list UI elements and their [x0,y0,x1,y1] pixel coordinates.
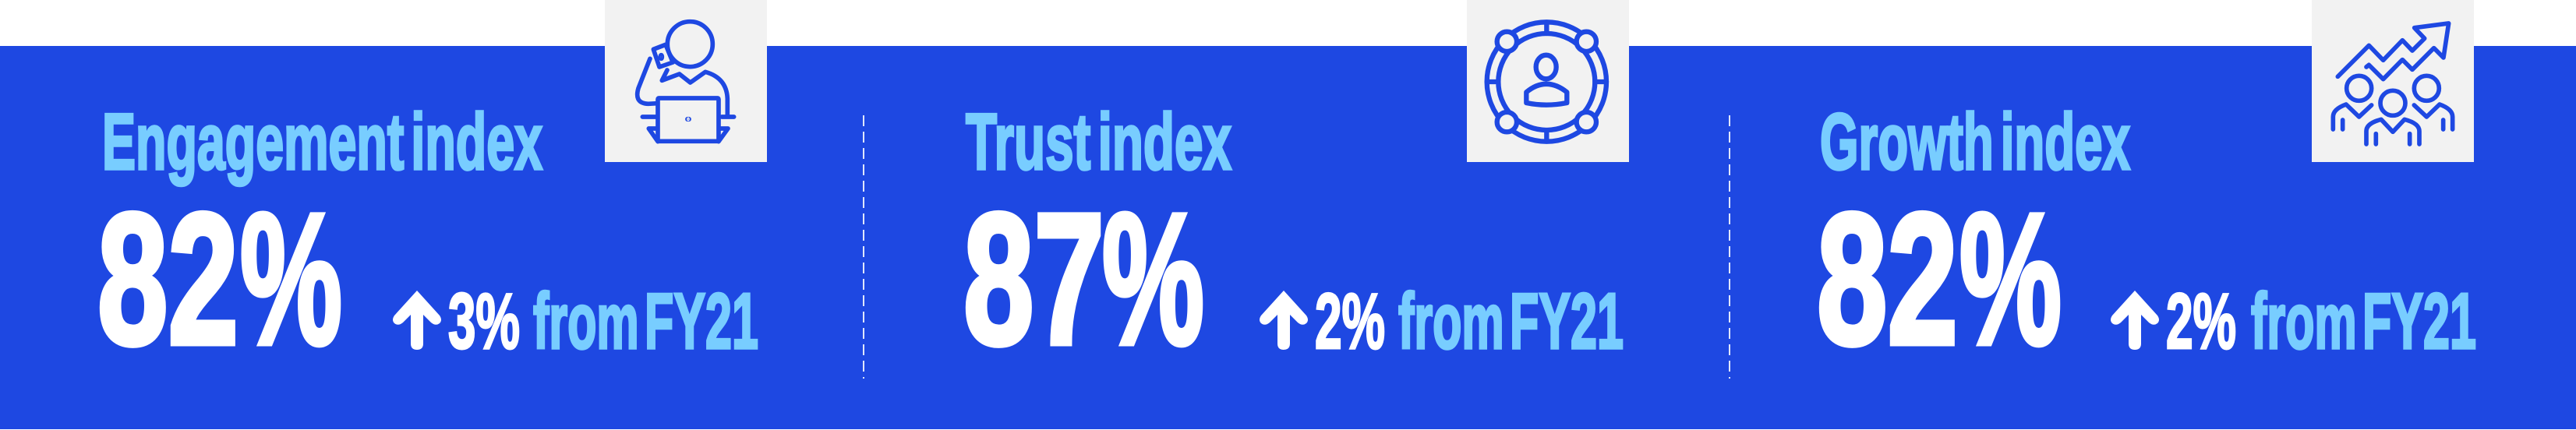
caption: from FY21: from FY21 [1398,278,1624,365]
value: 87%: % [1102,174,1204,383]
heading: growth index: Growth index [1820,97,2130,186]
divider: dashed line 2 [1729,115,1730,379]
value: 82%: 82 [97,174,239,383]
panel: engagement index [97,0,767,383]
panel: growth index [1817,0,2476,383]
value: 87%: 87 [963,174,1104,383]
value: 82%: % [1959,174,2062,383]
icon: up arrow [2111,291,2159,350]
caption: from FY21: from FY21 [533,278,758,365]
panel: trust index [963,0,1629,383]
value: 82%: 82 [1817,174,1958,383]
icon tile: team with rising arrow [2312,0,2474,162]
divider: dashed line 1 [863,115,864,379]
icon: up arrow [393,291,441,350]
value: 82%: % [240,174,342,383]
heading: trust index: Trust index [966,97,1231,186]
change: 2%: 2% [2166,278,2236,365]
icon tile: person on phone at laptop [605,0,767,162]
icon tile: person in network ring [1467,0,1629,162]
icon: up arrow [1260,291,1308,350]
change: 3%: 3% [448,278,520,365]
change: 2%: 2% [1315,278,1385,365]
heading: engagement index: Engagement index [102,97,542,186]
